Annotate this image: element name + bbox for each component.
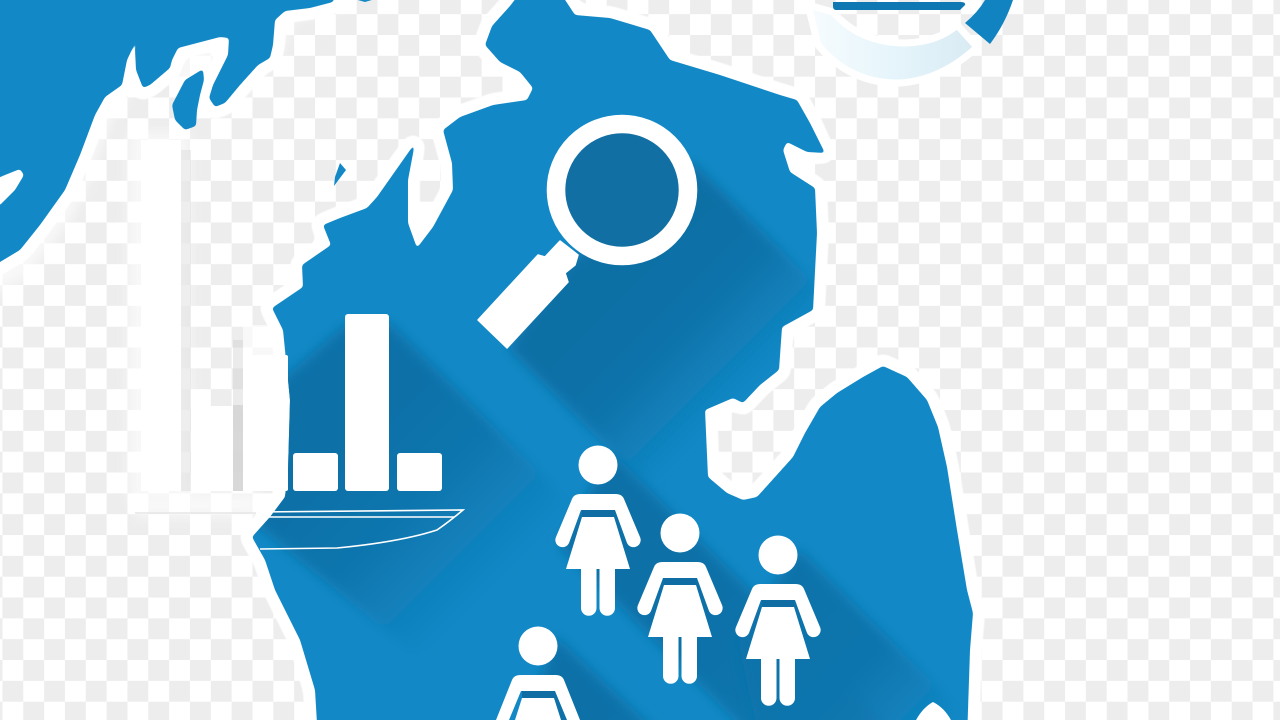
person 3 — [735, 536, 821, 706]
swoosh outline — [256, 510, 463, 549]
upper peninsula shape — [0, 0, 345, 280]
swoosh inner line — [262, 516, 454, 518]
people shadow: persons one and two — [558, 456, 762, 720]
baseline swoosh — [135, 510, 463, 549]
upper peninsula halo — [0, 0, 345, 280]
tiny islet — [334, 163, 346, 186]
lens — [556, 124, 688, 256]
bar 3 — [243, 355, 288, 491]
bar chart — [141, 140, 442, 491]
people shadow: person three — [761, 550, 932, 720]
top sliver — [347, 0, 382, 2]
map: upper peninsula — [0, 0, 382, 280]
lower peninsula shape — [252, 0, 973, 720]
bar 5 — [345, 314, 389, 491]
map: lower peninsula — [252, 0, 973, 720]
person 4 — [496, 626, 580, 720]
bar 6 — [397, 453, 442, 491]
gauge blue arc — [965, 0, 1013, 44]
handle — [478, 241, 578, 348]
bottom white notch — [915, 702, 952, 720]
bar 2 — [191, 406, 233, 491]
bar 4 — [293, 453, 338, 491]
bar shadows on checkerboard — [181, 150, 243, 491]
bar 3 faint top — [243, 325, 276, 355]
bar chart shadow — [256, 320, 538, 626]
gauge pale arc — [808, 5, 977, 83]
magnifier shadow — [508, 162, 814, 464]
lower peninsula halo — [252, 0, 973, 720]
long shadows on the map — [250, 162, 1000, 720]
bar 1 — [141, 140, 181, 491]
gauge graphic, top right — [808, 0, 1013, 83]
soft white glow around the map — [0, 0, 345, 517]
magnifying glass icon — [478, 124, 688, 348]
people icons — [496, 446, 821, 720]
swoosh faint left part — [135, 512, 256, 514]
small island — [172, 69, 204, 130]
gauge blue bar — [833, 2, 965, 10]
person 2 — [637, 514, 723, 684]
people shadow: person four — [538, 637, 648, 720]
person 1 — [555, 446, 641, 616]
